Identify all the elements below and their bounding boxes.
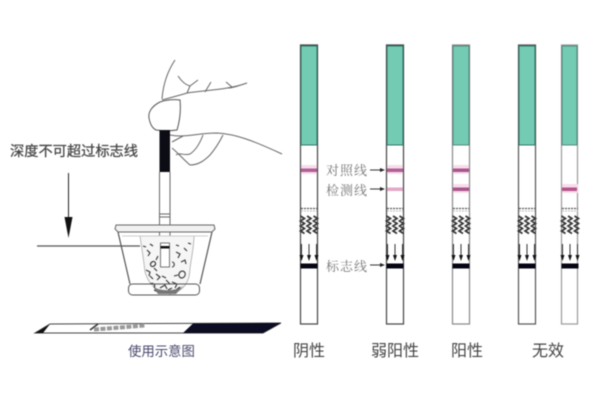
label: marker line: 标志线	[326, 259, 367, 274]
label: test line	[326, 183, 385, 198]
strip: positive	[452, 45, 470, 324]
label: weak positive: 弱阳性	[371, 342, 419, 360]
cup base	[128, 284, 200, 295]
label: control line	[326, 163, 385, 178]
label: invalid: 无效	[532, 342, 564, 360]
strip: weak positive	[386, 45, 404, 324]
line: liquid level	[37, 245, 140, 247]
label: marker line	[326, 259, 385, 274]
label: negative: 阴性	[293, 342, 325, 360]
strip: invalid, no lines	[518, 45, 536, 324]
icon: tilted test strip	[35, 323, 281, 333]
icon: hand holding test strip	[149, 60, 282, 165]
icon: cup with sample	[115, 225, 215, 295]
text: depth warning: 深度不可超过标志线	[10, 144, 138, 160]
sample liquid	[140, 236, 194, 294]
caption: usage diagram: 使用示意图	[128, 343, 195, 359]
label: test line: 检测线	[326, 183, 367, 198]
strip: invalid, test line only	[560, 45, 580, 324]
label: control line: 对照线	[326, 163, 367, 178]
cup body	[118, 232, 212, 284]
label: positive: 阳性	[451, 342, 483, 360]
cup rim	[115, 225, 215, 232]
icon: strip held in hand	[160, 130, 170, 267]
strip: negative	[300, 45, 318, 324]
arrow: depth downward	[64, 173, 72, 238]
